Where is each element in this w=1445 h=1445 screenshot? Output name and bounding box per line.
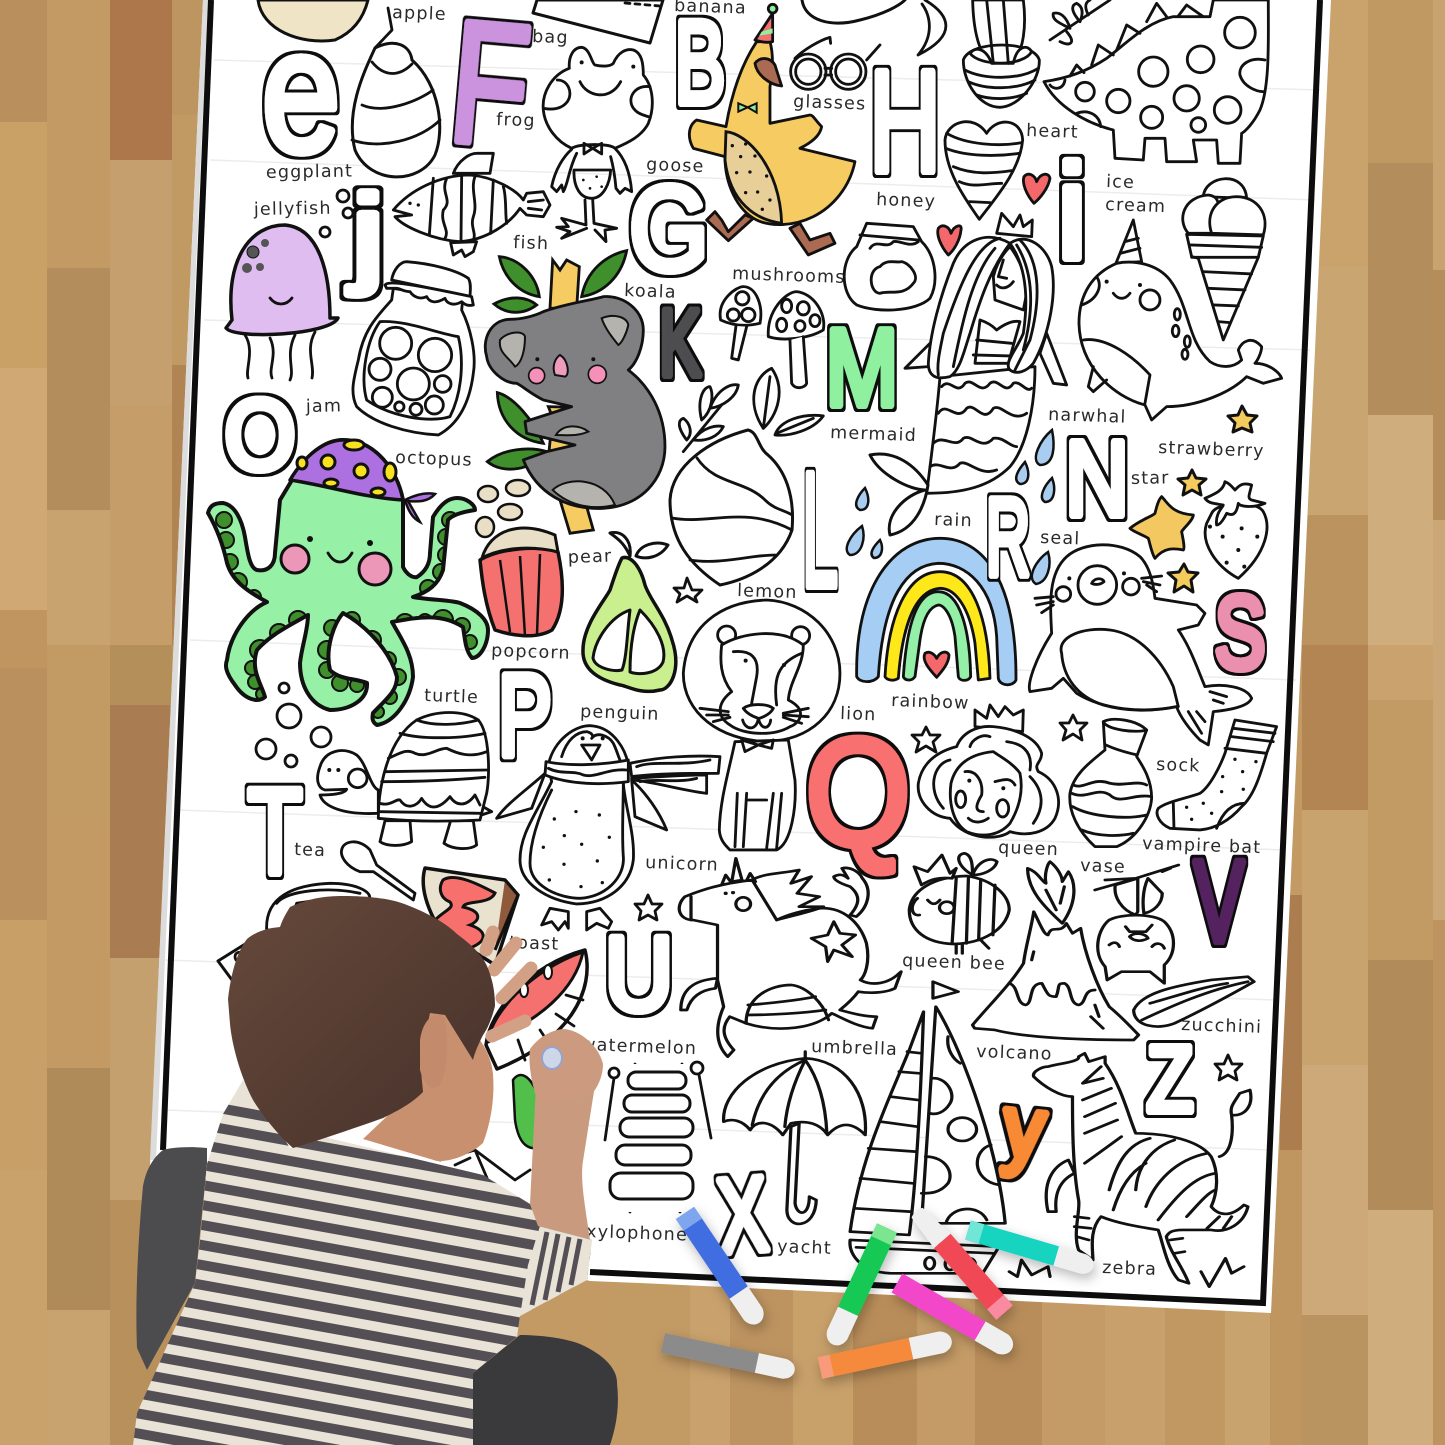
letters: i (1057, 138, 1087, 287)
letters: V (1194, 837, 1244, 966)
marker: green (823, 1223, 897, 1349)
letters: Q (806, 709, 910, 877)
icon: banana/monkey top (802, 0, 946, 55)
illustration: boy (130, 896, 603, 1445)
icon: dinosaur (1044, 0, 1268, 163)
marker: red (908, 1204, 1013, 1320)
letters: X (714, 1156, 771, 1276)
word labels: popcorn (491, 641, 571, 664)
icon: goose (689, 4, 855, 255)
icon: koala (485, 297, 665, 508)
icon: frog (543, 47, 652, 242)
word labels: cream (1105, 195, 1166, 217)
icon: yacht (850, 982, 1005, 1273)
icon: heart tag (218, 941, 250, 980)
word labels: rainbow (891, 691, 970, 714)
word labels: mushrooms (732, 264, 846, 288)
word labels: queen (998, 838, 1059, 860)
letters: G (629, 161, 709, 296)
marker in hand (542, 1047, 562, 1069)
icons drawn at upper-middle zoom scale (485, 4, 880, 533)
word labels (253, 0, 1265, 1280)
icon: seal (1029, 545, 1252, 745)
marker: blue (676, 1207, 768, 1329)
letters: j (348, 174, 384, 296)
icon: crown lines under boy chin (440, 1150, 530, 1185)
word labels: heart (1026, 121, 1079, 143)
icon: tea cup (267, 883, 370, 930)
word labels: tea (294, 840, 326, 861)
letter R over rainbow: R (986, 475, 1030, 598)
icon: popcorn (476, 480, 562, 636)
word labels: xylophone (586, 1222, 688, 1246)
icon: lion (683, 600, 840, 850)
word labels: vampire bat (1142, 834, 1262, 858)
icon: bag top (533, 0, 663, 43)
icon: green W letter (513, 1075, 538, 1148)
icon: vampire bat (1095, 865, 1179, 983)
letters: H (869, 42, 941, 202)
word labels: yacht (777, 1237, 832, 1259)
icon: zucchini (1134, 977, 1254, 1027)
word labels: zebra (1102, 1258, 1157, 1280)
word labels: sock (1156, 755, 1201, 777)
word labels: pear (567, 546, 613, 568)
letters: y (999, 1076, 1050, 1179)
word labels: mermaid (830, 423, 917, 446)
word labels: eggplant (266, 161, 353, 183)
icon: mermaid tail fin (870, 454, 928, 535)
icon: heart striped (945, 122, 1023, 219)
icons drawn at right-middle zoom scale (857, 482, 1277, 847)
icon: watermelon (486, 950, 587, 1069)
word labels: toast (509, 933, 560, 955)
word labels: star (1131, 468, 1170, 489)
icon: toast (423, 868, 518, 965)
marker: teal (965, 1220, 1096, 1276)
word labels: jellyfish (253, 199, 332, 220)
icons drawn at jam and fish zoom scale (353, 153, 550, 435)
icon: leaf branch (1050, 0, 1110, 44)
icon: fish (393, 153, 550, 257)
word labels: rain (934, 510, 973, 531)
icon: octopus (208, 440, 488, 725)
ear (420, 1015, 447, 1088)
fingers (486, 932, 531, 1036)
letters: S (1215, 576, 1265, 691)
icon: turtle (318, 712, 492, 849)
word labels: unicorn (645, 853, 719, 876)
face and neck (363, 1010, 493, 1161)
word labels: glasses (793, 92, 867, 115)
marker: pink (892, 1273, 1017, 1359)
icon: apple top (258, 0, 368, 41)
word labels: bag (532, 27, 569, 48)
word labels: zucchini (1181, 1015, 1263, 1038)
word labels: penguin (580, 702, 660, 725)
letters: O (225, 381, 295, 491)
icon: mushrooms (720, 287, 824, 388)
markers (661, 1204, 1096, 1381)
poster art (208, 0, 1282, 1287)
icon: pear (583, 532, 676, 691)
letters: K (659, 290, 701, 395)
word labels: lion (840, 704, 877, 725)
icon: sock (1157, 720, 1277, 830)
icons drawn at middle zoom scale (497, 600, 840, 930)
icon: small hearts (938, 174, 1050, 255)
icon: rain drops (847, 430, 1054, 584)
word labels: watermelon (581, 1035, 697, 1059)
word labels: turtle (424, 686, 479, 708)
icon: stars (635, 406, 1257, 1080)
word labels: vase (1080, 856, 1126, 878)
fist (529, 1029, 603, 1103)
letters: T (248, 764, 302, 899)
icon: unicorn (679, 858, 901, 1057)
word labels: queen bee (902, 951, 1006, 975)
word labels: frog (496, 110, 536, 131)
letters: B (674, 0, 726, 129)
icon: tea spoon (341, 842, 415, 900)
marker: orange (818, 1329, 954, 1379)
icon: koala branch (548, 260, 593, 533)
icon: mermaid (905, 213, 1067, 493)
icon: cactus pot (963, 0, 1039, 107)
icon: boy's far leg (136, 1147, 618, 1445)
icons drawn at upper-right zoom scale (844, 0, 1282, 493)
word labels: umbrella (811, 1037, 898, 1060)
shirt (130, 1070, 600, 1445)
word labels: ice (1106, 172, 1135, 193)
icon: honey jar (844, 223, 935, 310)
icon: ice cream (1183, 179, 1265, 340)
word labels: honey (876, 190, 937, 212)
icon: zebra (1009, 1053, 1251, 1287)
letters: N (1065, 419, 1129, 538)
arm (530, 1085, 595, 1240)
word labels: volcano (976, 1042, 1053, 1065)
word labels: apple (392, 3, 447, 25)
icon: big star (1130, 497, 1193, 558)
icon: penguin (497, 726, 720, 930)
icon: koala leaves (487, 251, 627, 469)
word labels: lemon (737, 581, 798, 603)
icons drawn at turtle zoom scale (267, 712, 492, 930)
word labels: strawberry (1158, 438, 1265, 462)
hair (228, 896, 495, 1148)
word labels: seal (1040, 528, 1081, 549)
letters (225, 0, 1265, 1276)
icon: umbrella (724, 1052, 866, 1224)
icon: bubbles (256, 683, 331, 767)
letters: Z (1147, 1028, 1193, 1132)
word labels: octopus (395, 448, 473, 471)
letters: P (498, 651, 552, 780)
icon: glasses (791, 37, 880, 89)
icon: eggplant (352, 8, 440, 177)
icon: leaves near lemon (679, 368, 823, 452)
icon: vase (1070, 719, 1152, 847)
marker: grey (661, 1333, 797, 1381)
word labels: fish (513, 233, 550, 254)
word labels: narwhal (1048, 405, 1127, 428)
icons drawn at lower-right zoom scale (679, 853, 1254, 1287)
word labels: koala (624, 281, 677, 303)
icon: jellyfish (226, 190, 353, 380)
letters: U (605, 916, 673, 1033)
word labels: goose (646, 155, 705, 177)
letters: L (802, 440, 838, 621)
poster sheet (150, 0, 1331, 1313)
icon: rainbow (857, 538, 1016, 685)
icon: volcano (973, 862, 1139, 1040)
icon: xylophone (605, 1062, 711, 1212)
letters: M (826, 307, 898, 428)
icon: strawberry (1205, 482, 1267, 578)
icon: jam jar (353, 262, 474, 435)
icon: queen (918, 705, 1059, 837)
icon: queen bee (909, 853, 1009, 953)
icon: narwhal (1079, 220, 1282, 420)
icon: lemon (670, 430, 793, 585)
word labels: jam (305, 396, 342, 417)
